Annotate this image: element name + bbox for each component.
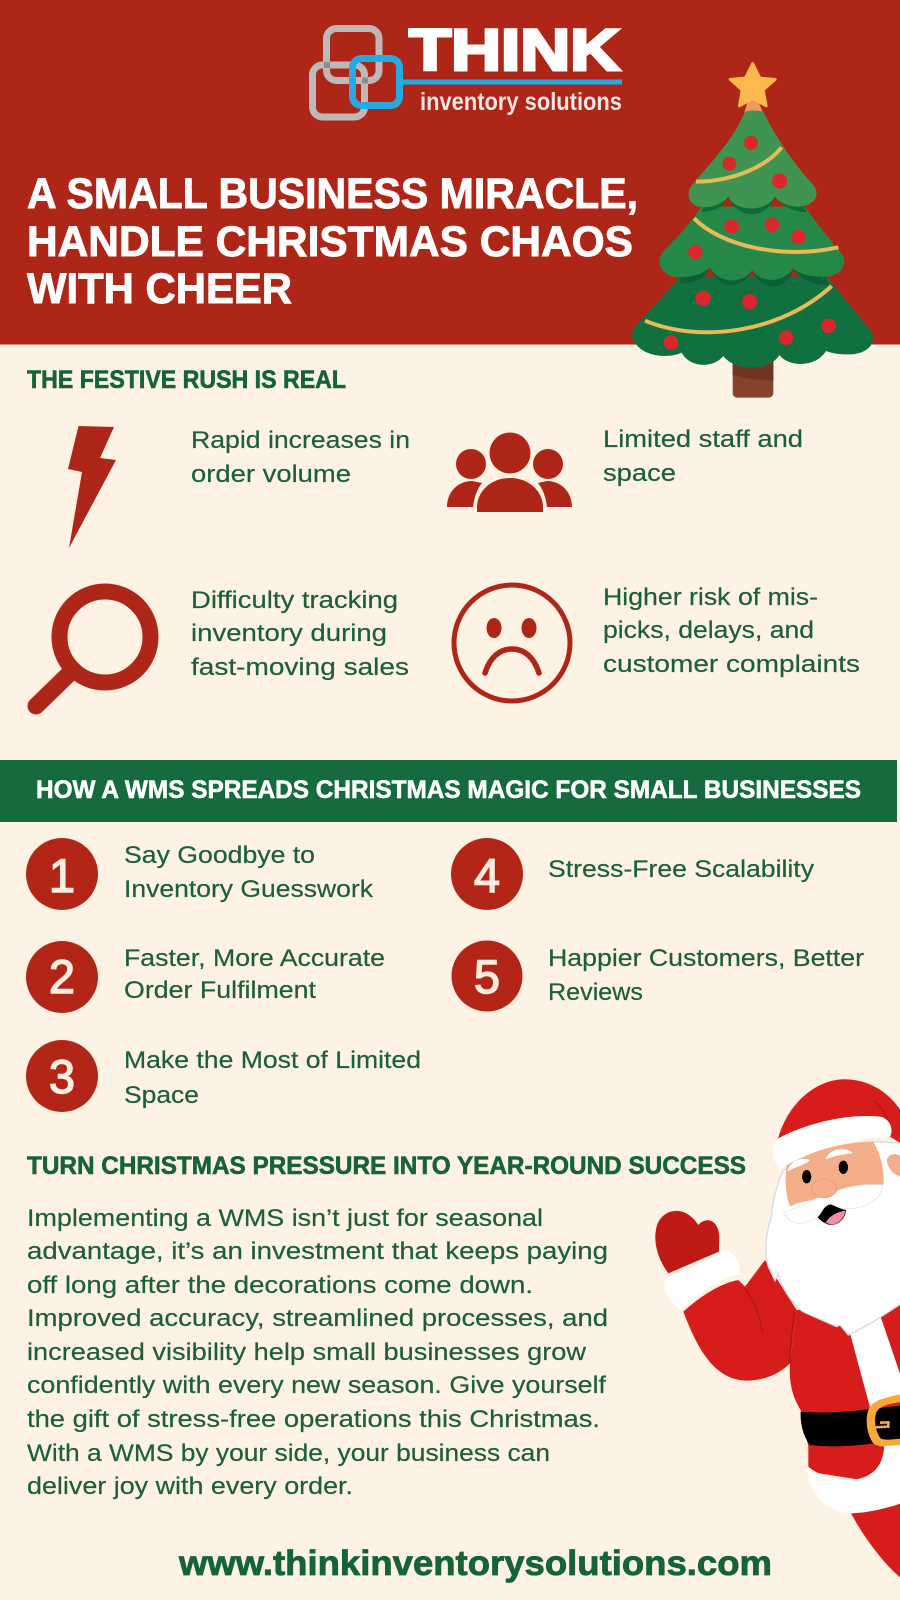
body paragraph: increased visibility help small businesses grow bbox=[27, 1339, 587, 1366]
icon: group of people bbox=[447, 432, 572, 512]
icon: sad face bbox=[454, 585, 570, 701]
text: limited staff bbox=[603, 426, 803, 487]
title: A SMALL BUSINESS MIRACLE, bbox=[27, 170, 638, 218]
tree lower tier bbox=[632, 277, 873, 368]
logo tagline: inventory solutions bbox=[420, 88, 622, 116]
benefit 3: Make the Most of Limited bbox=[124, 1047, 421, 1074]
header panel bbox=[0, 0, 900, 344]
text: rapid increases bbox=[191, 427, 410, 488]
section banner: WMS magic: HOW A WMS SPREADS CHRISTMAS MAGIC FOR SMALL BUSINESSES bbox=[36, 776, 861, 804]
text: difficulty tracking: inventory during bbox=[191, 620, 387, 647]
body paragraph: Improved accuracy, streamlined processes, and bbox=[27, 1305, 608, 1332]
title: WITH CHEER bbox=[27, 265, 292, 313]
santa mouth bbox=[818, 1204, 846, 1225]
body paragraph: advantage, it’s an investment that keeps paying bbox=[27, 1238, 608, 1265]
text: higher risk: Higher risk of mis- bbox=[603, 584, 818, 611]
santa illustration bbox=[655, 1079, 900, 1577]
logo squares bbox=[312, 28, 400, 117]
benefit 3 bbox=[26, 1040, 421, 1112]
tree garlands bbox=[645, 147, 838, 332]
text: rapid increases: Rapid increases in bbox=[191, 427, 410, 454]
santa belt bbox=[801, 1405, 900, 1446]
text: higher risk: picks, delays, and bbox=[603, 617, 814, 644]
text: limited staff: Limited staff and bbox=[603, 426, 803, 453]
body paragraph: the gift of stress-free operations this Christmas. bbox=[27, 1406, 600, 1433]
santa ear bbox=[887, 1154, 900, 1177]
benefit 4: 4 bbox=[474, 849, 500, 902]
benefit 3: Space bbox=[124, 1082, 199, 1109]
benefit 5 bbox=[452, 940, 864, 1012]
text: difficulty tracking: fast-moving sales bbox=[191, 654, 409, 681]
website url: www.thinkinventorysolutions.com bbox=[178, 1544, 772, 1583]
benefit 2: Faster, More Accurate bbox=[124, 945, 385, 972]
santa coat stripe bbox=[850, 1315, 900, 1407]
santa nose bbox=[811, 1179, 837, 1198]
tree upper tier bbox=[689, 110, 817, 209]
section banner: WMS magic bbox=[0, 760, 897, 822]
santa leg bbox=[851, 1500, 900, 1577]
icon: lightning bolt bbox=[68, 426, 116, 548]
body paragraph: deliver joy with every order. bbox=[27, 1473, 353, 1500]
tree ornaments bbox=[664, 136, 836, 350]
benefit 5: Reviews bbox=[548, 979, 643, 1006]
santa coat hem bbox=[807, 1445, 900, 1513]
christmas tree illustration bbox=[632, 63, 873, 398]
tree upper shadow bbox=[702, 197, 807, 214]
tree star base bbox=[744, 99, 763, 113]
logo bbox=[312, 18, 622, 117]
section heading: year-round success: TURN CHRISTMAS PRESSURE INTO YEAR-ROUND SUCCESS bbox=[27, 1152, 746, 1180]
body paragraph: Implementing a WMS isn’t just for seasonal bbox=[27, 1205, 543, 1232]
benefit 5: 5 bbox=[474, 950, 500, 1003]
benefit 2: Order Fulfilment bbox=[124, 977, 316, 1004]
text: difficulty tracking bbox=[191, 587, 409, 681]
body paragraph: confidently with every new season. Give yourself bbox=[27, 1372, 606, 1399]
santa face bbox=[786, 1142, 884, 1207]
benefit 2: 2 bbox=[49, 950, 75, 1003]
text: higher risk: customer complaints bbox=[603, 651, 860, 678]
santa cuff bbox=[664, 1250, 740, 1311]
benefit 3: 3 bbox=[49, 1050, 75, 1103]
tree lower shadow bbox=[679, 267, 828, 287]
icon: magnifying glass bbox=[36, 592, 150, 706]
title: HANDLE CHRISTMAS CHAOS bbox=[27, 218, 633, 266]
santa hat bbox=[777, 1079, 900, 1145]
body paragraph: off long after the decorations come down. bbox=[27, 1272, 533, 1299]
benefit 4 bbox=[451, 838, 814, 910]
benefit 4: Stress-Free Scalability bbox=[548, 856, 814, 883]
benefit 1: Say Goodbye to bbox=[124, 842, 315, 869]
santa moustache bbox=[783, 1185, 883, 1223]
panel: numbered benefits bbox=[26, 838, 864, 1112]
benefit 5: Happier Customers, Better bbox=[548, 945, 864, 972]
benefit 1: 1 bbox=[49, 849, 75, 902]
text: limited staff: space bbox=[603, 460, 676, 487]
tree middle tier bbox=[659, 207, 844, 280]
benefit 2 bbox=[26, 941, 385, 1013]
santa torso bbox=[790, 1303, 900, 1487]
logo line bbox=[402, 80, 622, 84]
santa buckle bbox=[867, 1394, 900, 1447]
santa mitten bbox=[655, 1211, 719, 1273]
title bbox=[27, 170, 638, 313]
text: higher risk bbox=[603, 584, 860, 678]
tree star bbox=[730, 63, 775, 106]
santa hat brim bbox=[773, 1116, 892, 1168]
text: rapid increases: order volume bbox=[191, 461, 351, 488]
santa arm bbox=[683, 1260, 797, 1381]
body paragraph: With a WMS by your side, your business can bbox=[27, 1440, 550, 1467]
santa beard bbox=[766, 1142, 900, 1335]
benefit 1 bbox=[26, 838, 374, 910]
santa eyebrows bbox=[788, 1149, 853, 1172]
text: difficulty tracking: Difficulty tracking bbox=[191, 587, 398, 614]
body paragraph bbox=[27, 1205, 608, 1500]
panel: festive rush items bbox=[36, 426, 860, 706]
tree trunk bbox=[733, 355, 773, 398]
section heading: festive rush: THE FESTIVE RUSH IS REAL bbox=[27, 366, 346, 394]
santa eyes bbox=[802, 1161, 848, 1183]
logo wordmark: THINK bbox=[409, 18, 620, 83]
benefit 1: Inventory Guesswork bbox=[124, 876, 374, 903]
